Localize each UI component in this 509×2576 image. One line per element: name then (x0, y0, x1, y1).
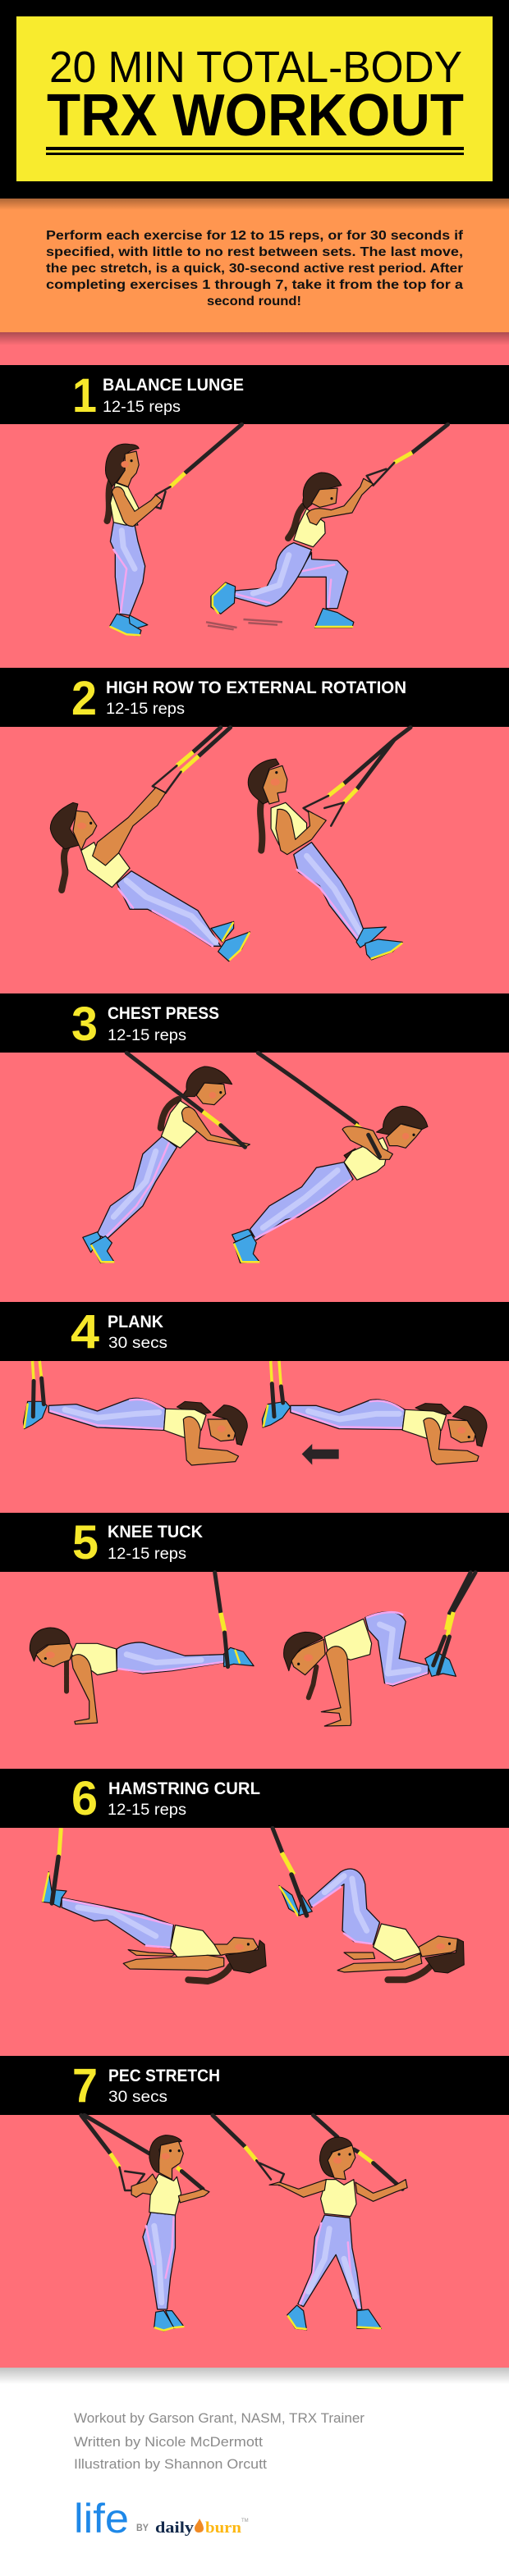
panel: exercise 1 (0, 365, 509, 668)
heading: pec stretch: PEC STRETCH (108, 2067, 220, 2085)
panel: exercise 4 (0, 1302, 509, 1513)
panel: exercise 3 (0, 993, 509, 1302)
figure: standing (105, 424, 241, 636)
number 1: 1 (72, 369, 97, 422)
panel: exercise 7 (0, 2056, 509, 2368)
figure: external rotation (248, 728, 410, 960)
logo: life by daily burn: daily (155, 2519, 195, 2537)
figure: press lowered (232, 1053, 428, 1263)
figure: plank start (23, 1361, 247, 1465)
figure: press start (83, 1053, 250, 1263)
figure: stretch start (81, 2115, 209, 2332)
bottom shadow (0, 2368, 509, 2384)
logo: life by daily burn: BY (136, 2522, 149, 2533)
number 7: 7 (72, 2059, 98, 2112)
number 2: 2 (71, 672, 97, 725)
logo: life by daily burn (74, 2496, 249, 2542)
logo: life by daily burn: burn (205, 2519, 241, 2537)
heading: hamstring curl: HAMSTRING CURL (108, 1779, 260, 1798)
heading: chest press: CHEST PRESS (108, 1004, 219, 1023)
logo: life by daily burn: life (74, 2496, 129, 2542)
panel: intro: the pec stretch, is a quick, 30-second active rest period. After (46, 262, 463, 276)
reps: 12-15 reps (103, 399, 181, 416)
heading: balance lunge: BALANCE LUNGE (103, 376, 244, 395)
title: TRX WORKOUT (47, 83, 464, 148)
number 4: 4 (71, 1305, 99, 1359)
panel: intro: Perform each exercise for 12 to 15 reps, or for 30 seconds if (46, 229, 464, 243)
heading: plank: PLANK (108, 1313, 163, 1331)
figure: curl start (42, 1828, 266, 1981)
title (46, 43, 464, 155)
figure: curl (273, 1828, 464, 1980)
panel: intro: completing exercises 1 through 7, take it from the top for a (46, 278, 463, 292)
credits: Written by Nicole McDermott (74, 2434, 263, 2450)
credits: Illustration by Shannon Orcutt (74, 2456, 267, 2472)
duration: 30 secs (108, 2089, 167, 2106)
number 6: 6 (71, 1772, 98, 1825)
credits (74, 2410, 365, 2472)
panel: intro: specified, with little to no rest between sets. The last move, (46, 245, 463, 259)
reps: 12-15 reps (108, 1027, 186, 1044)
figure: stretch open (213, 2115, 407, 2330)
reps: 12-15 reps (106, 701, 185, 718)
header panel (0, 0, 509, 199)
number 3: 3 (71, 998, 98, 1051)
number 5: 5 (72, 1516, 99, 1569)
figure: tuck (284, 1573, 475, 1726)
logo: life by daily burn: TM (241, 2519, 249, 2523)
panel: exercise 5 (0, 1513, 509, 1769)
panel: exercise 2 (0, 668, 509, 993)
reps: 12-15 reps (108, 1546, 186, 1563)
title: 20 MIN TOTAL-BODY (49, 43, 462, 92)
panel: intro: second round! (207, 295, 301, 308)
figure: lunge (206, 424, 448, 629)
heading: high row: HIGH ROW TO EXTERNAL ROTATION (106, 678, 406, 697)
figure: high row start (50, 728, 250, 961)
reps: 12-15 reps (108, 1802, 186, 1819)
arrow (302, 1444, 339, 1465)
credits: Workout by Garson Grant, NASM, TRX Trainer (74, 2410, 365, 2426)
figure: tuck start (30, 1573, 254, 1724)
panel: exercise 6 (0, 1769, 509, 2056)
panel: intro (0, 199, 509, 332)
duration: 30 secs (108, 1335, 167, 1352)
heading: knee tuck: KNEE TUCK (108, 1523, 203, 1541)
figure: plank pull (262, 1361, 487, 1464)
gap below intro (0, 332, 509, 365)
